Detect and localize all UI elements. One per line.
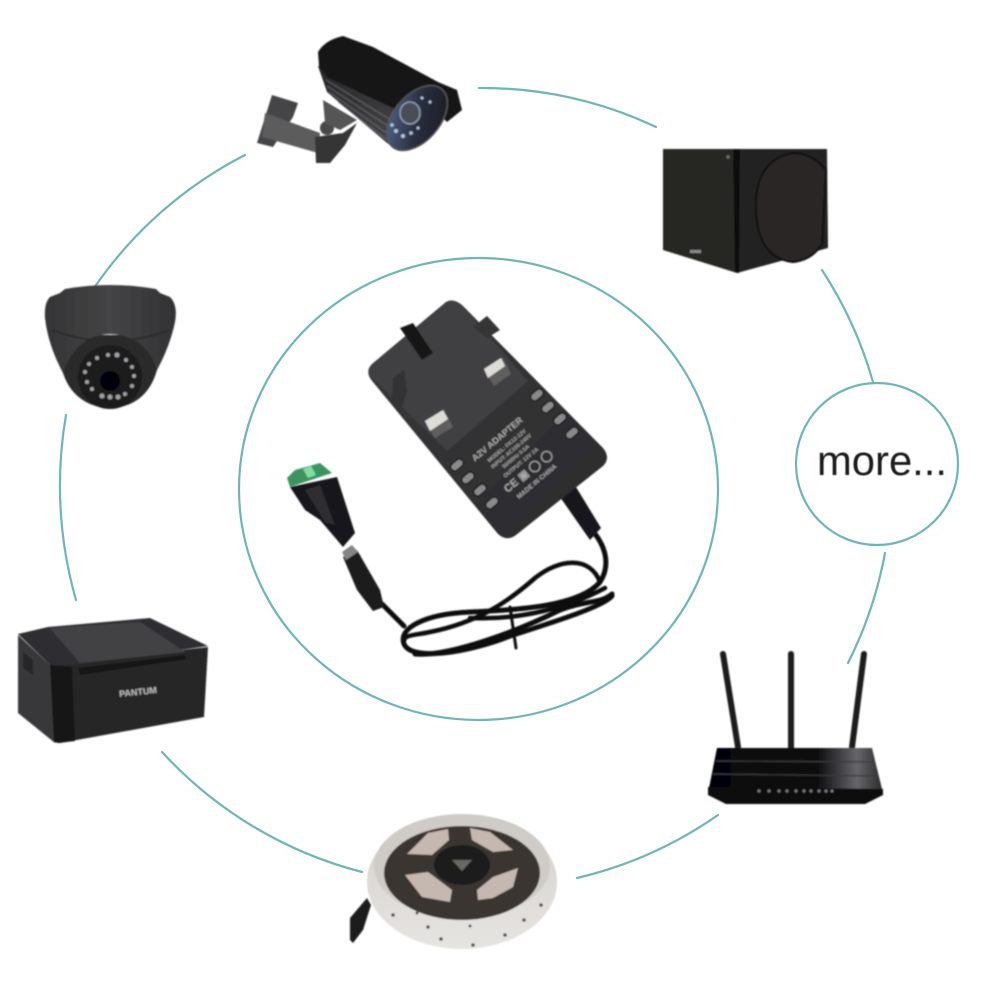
earth pin	[400, 323, 433, 360]
camera lens ring	[375, 74, 459, 162]
sun hood	[318, 36, 462, 122]
more label: more...	[817, 437, 947, 484]
speaker indicator	[726, 155, 730, 159]
connecting ring arcs	[60, 88, 885, 878]
icon: dome security camera	[45, 285, 176, 409]
bracket plate	[257, 95, 298, 147]
adapter rating label: MODEL: FK12-12V	[487, 428, 528, 464]
DC plug	[350, 898, 371, 943]
lens housing	[78, 345, 142, 409]
DC barrel connector	[342, 545, 384, 611]
camera housing	[318, 66, 440, 148]
front corner edge	[50, 665, 75, 743]
speaker corner edge	[733, 149, 740, 273]
paper tray lid	[50, 622, 185, 663]
reel flange	[384, 826, 540, 920]
neutral pin	[425, 410, 453, 438]
dome rim shadow	[52, 330, 170, 341]
reel windows	[405, 828, 518, 902]
router body	[708, 748, 883, 804]
plug notch details	[392, 370, 407, 412]
joint ball	[320, 121, 334, 135]
green terminals	[287, 463, 332, 487]
adapter rating label	[470, 414, 562, 507]
live pin	[484, 358, 511, 386]
lower dome	[56, 335, 165, 408]
adapter rating label: INPUT: AC100-240V	[490, 433, 533, 470]
central ellipse outline	[239, 258, 718, 720]
icon: wifi router	[708, 654, 883, 804]
vent slots right	[529, 387, 580, 441]
icon: power adapter with cable and terminal connector	[287, 301, 612, 654]
speaker driver recess	[756, 153, 826, 262]
icon: bullet security camera	[257, 36, 462, 163]
vent slots left	[449, 457, 500, 511]
speaker badge	[690, 250, 701, 253]
adapter rating label: A2V ADAPTER	[470, 415, 525, 463]
strip coil	[367, 815, 557, 949]
top ridges	[713, 761, 878, 776]
front seam	[78, 655, 187, 675]
adapter cable	[382, 528, 612, 654]
printer front	[50, 647, 208, 743]
coil LED dots	[391, 898, 543, 947]
hub highlight	[452, 860, 472, 871]
speaker left face	[663, 149, 738, 273]
icon: subwoofer speaker	[663, 149, 828, 273]
camera neck	[323, 100, 357, 130]
printer side	[18, 635, 55, 743]
wall bracket	[257, 95, 357, 163]
adapter body	[368, 301, 607, 538]
inner lens	[400, 102, 420, 124]
printer top	[18, 618, 208, 665]
more circle callout	[796, 383, 958, 545]
side vent	[23, 652, 33, 675]
IR LEDs ring	[83, 352, 136, 400]
antennas	[723, 654, 864, 747]
cable strain relief	[560, 487, 601, 540]
coil upper rim	[374, 814, 550, 918]
LED indicators	[758, 790, 834, 792]
PANTUM logo: PANTUM	[119, 685, 157, 699]
bracket joint	[315, 123, 357, 163]
front strip	[708, 787, 883, 804]
bracket arm	[262, 113, 320, 153]
dome cover	[45, 285, 176, 373]
plug faceplate	[369, 302, 528, 451]
reel hub	[434, 845, 490, 885]
terminal block	[287, 463, 355, 547]
icon: laser printer	[18, 618, 208, 743]
adapter rating label: CE ▣ ◯ ◯	[502, 448, 555, 495]
speaker right face	[737, 149, 828, 273]
lens highlights	[390, 96, 432, 138]
adapter rating label: OUTPUT: 12V 2A	[503, 447, 540, 480]
adapter rating label: 50/60Hz 0.5A	[501, 444, 531, 470]
icon: LED strip reel	[350, 814, 557, 949]
housing ribs	[326, 80, 394, 139]
adapter rating label: MADE IN CHINA	[516, 463, 559, 501]
central lens	[100, 371, 120, 391]
